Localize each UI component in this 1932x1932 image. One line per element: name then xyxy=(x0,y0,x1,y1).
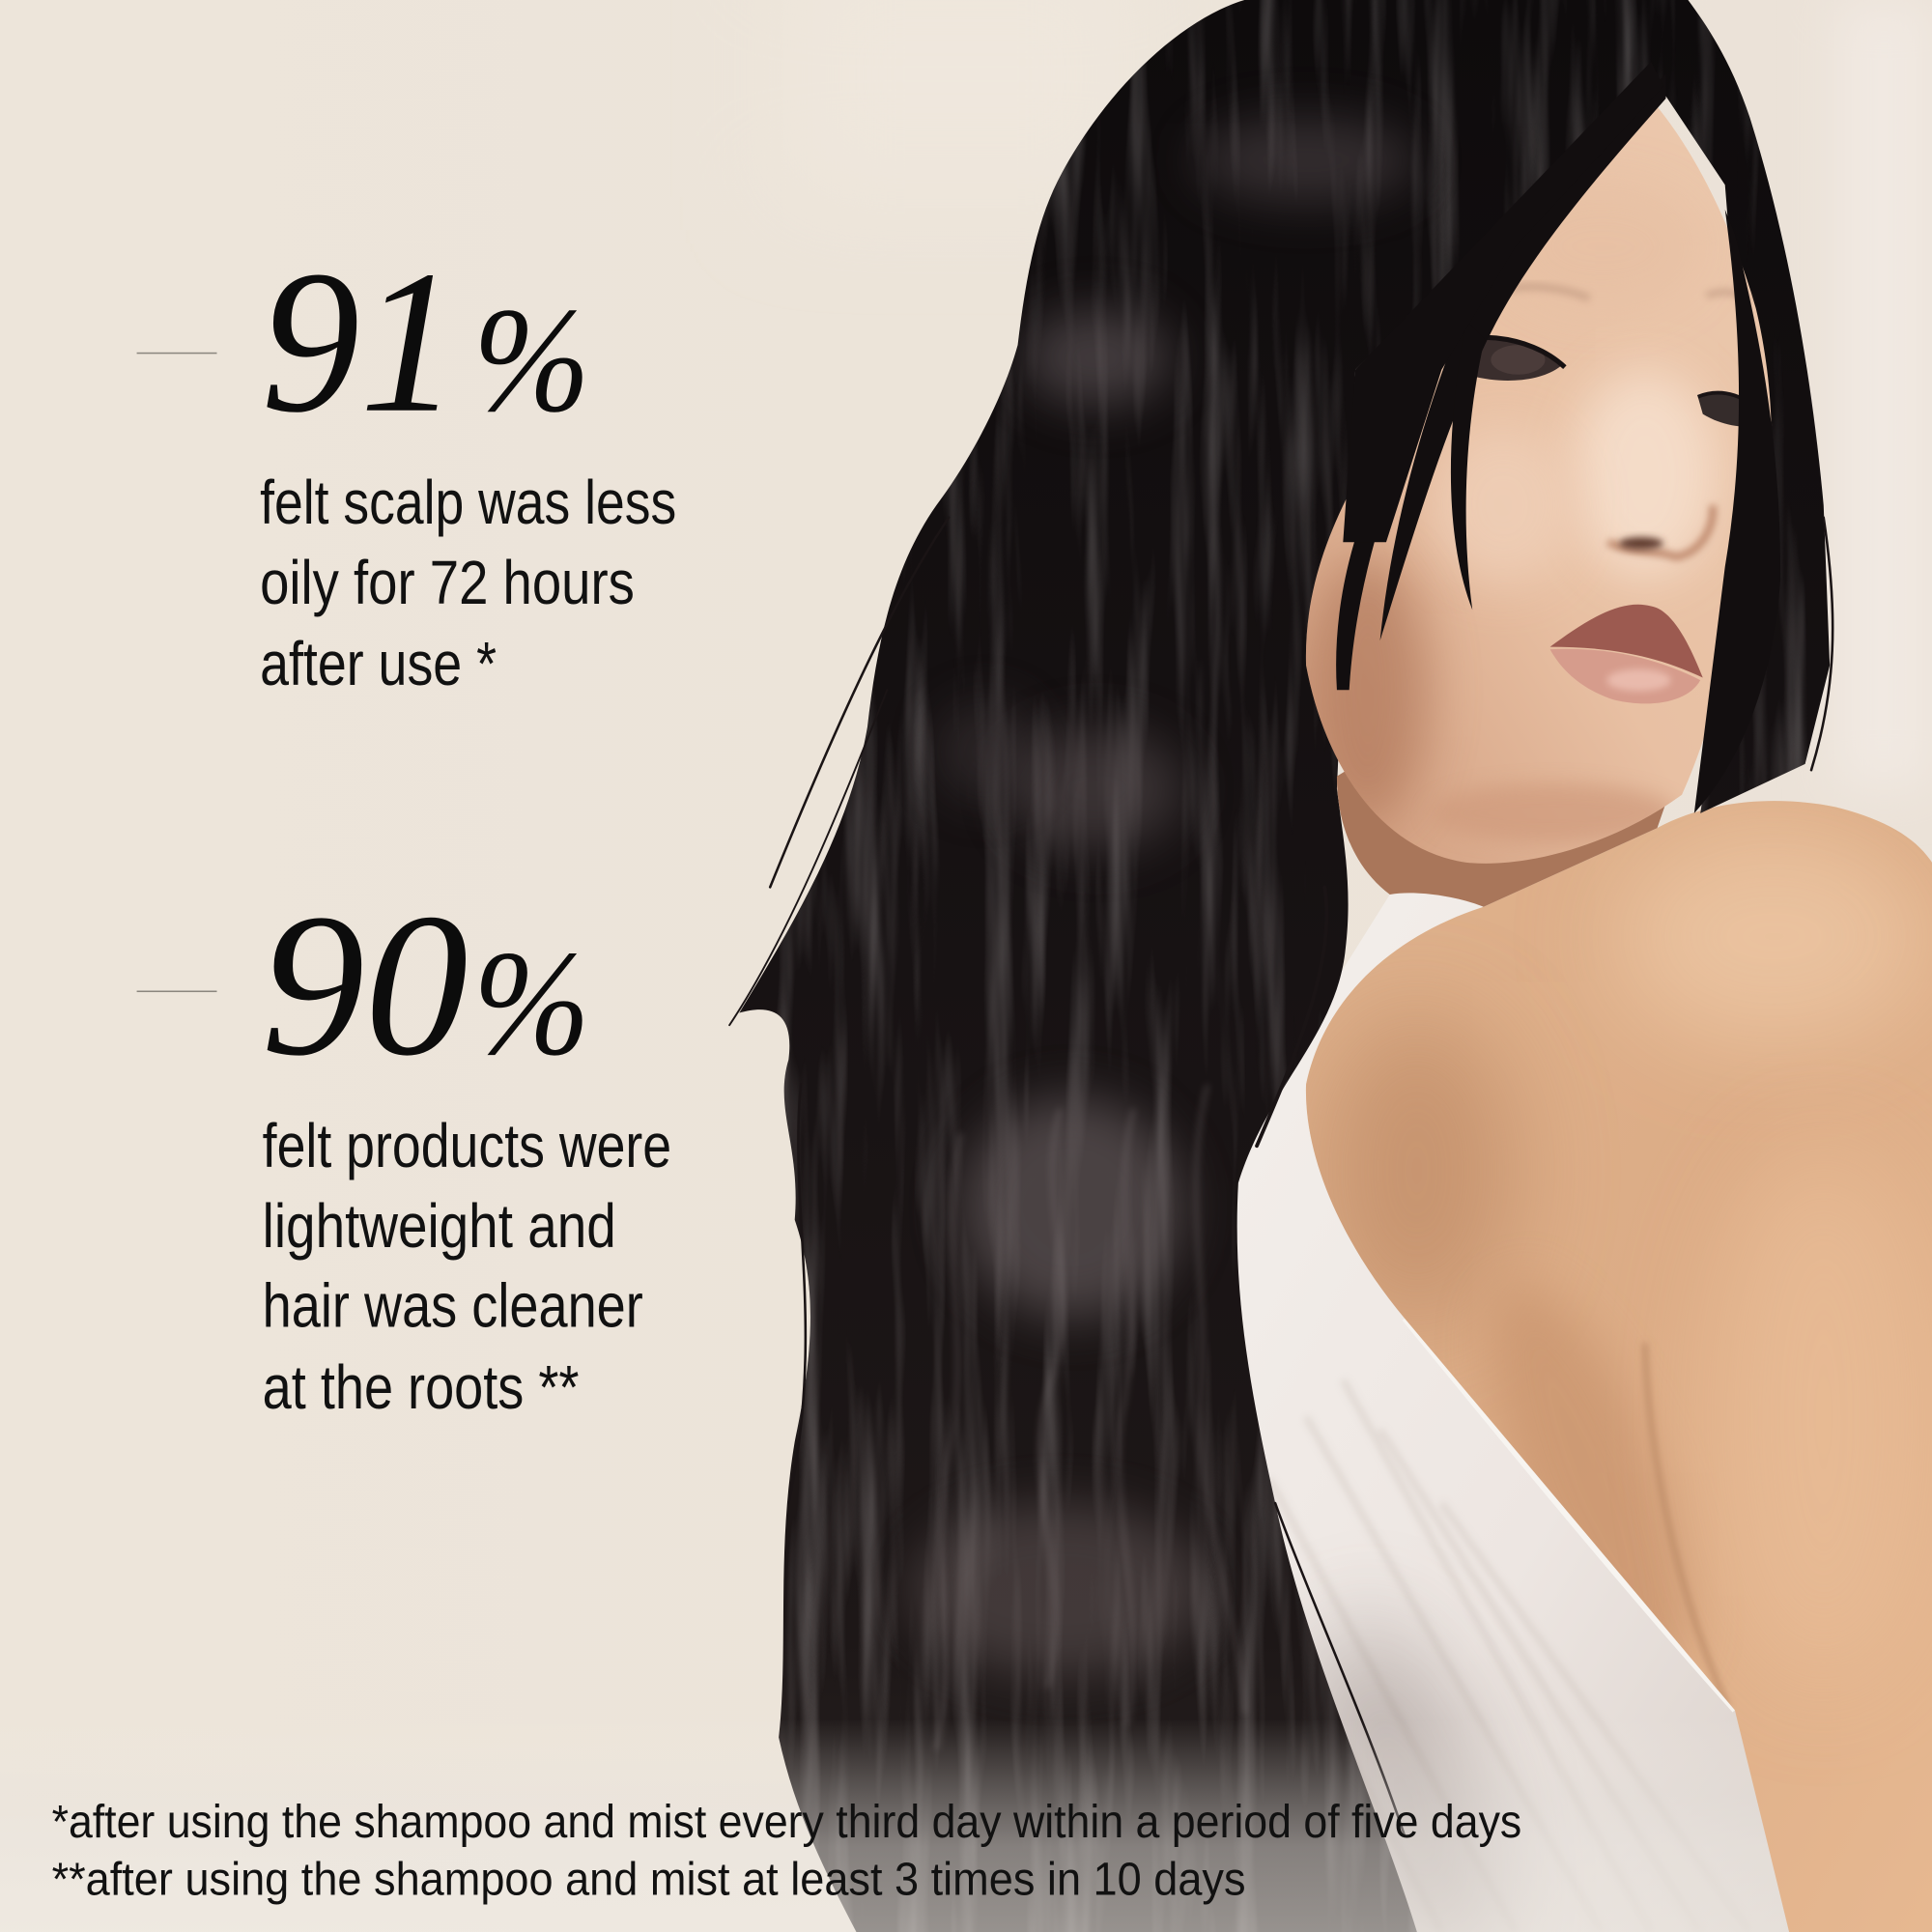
eyebrows xyxy=(1491,287,1749,300)
bottom fade overlay xyxy=(0,1719,1789,1932)
stat block: 90% xyxy=(137,871,671,1422)
description: felt products were xyxy=(263,1111,671,1180)
back and shoulder skin xyxy=(1306,801,1932,1932)
description xyxy=(260,468,676,698)
footnotes xyxy=(52,1796,1521,1906)
hair xyxy=(729,0,1848,1932)
dash marker xyxy=(137,991,216,992)
description: oily for 72 hours xyxy=(260,548,635,617)
fringe over the face xyxy=(1336,62,1780,813)
footnotes: **after using the shampoo and mist at least 3 times in 10 days xyxy=(52,1854,1246,1906)
right eye xyxy=(1698,393,1772,427)
nose xyxy=(1608,505,1713,557)
percent sign: % xyxy=(473,920,590,1087)
footnotes: *after using the shampoo and mist every third day within a period of five days xyxy=(52,1796,1521,1848)
loose hair strands xyxy=(729,518,1833,1836)
description: after use * xyxy=(260,629,497,698)
number 90: 90 xyxy=(261,871,469,1098)
photo: woman with long dark hair xyxy=(728,0,1932,1932)
left eye xyxy=(1423,337,1565,381)
lips xyxy=(1550,605,1703,703)
dash marker xyxy=(137,353,216,354)
face xyxy=(1306,86,1772,864)
number 91: 91 xyxy=(261,228,458,455)
description: lightweight and xyxy=(263,1191,616,1261)
description: hair was cleaner xyxy=(263,1271,643,1341)
description: felt scalp was less xyxy=(260,468,676,537)
percent sign: % xyxy=(473,276,590,443)
white ribbed tank top xyxy=(1182,893,1789,1932)
description xyxy=(263,1111,671,1422)
neck xyxy=(1337,690,1688,907)
stat block: 91% xyxy=(137,228,676,698)
description: at the roots ** xyxy=(263,1352,579,1422)
